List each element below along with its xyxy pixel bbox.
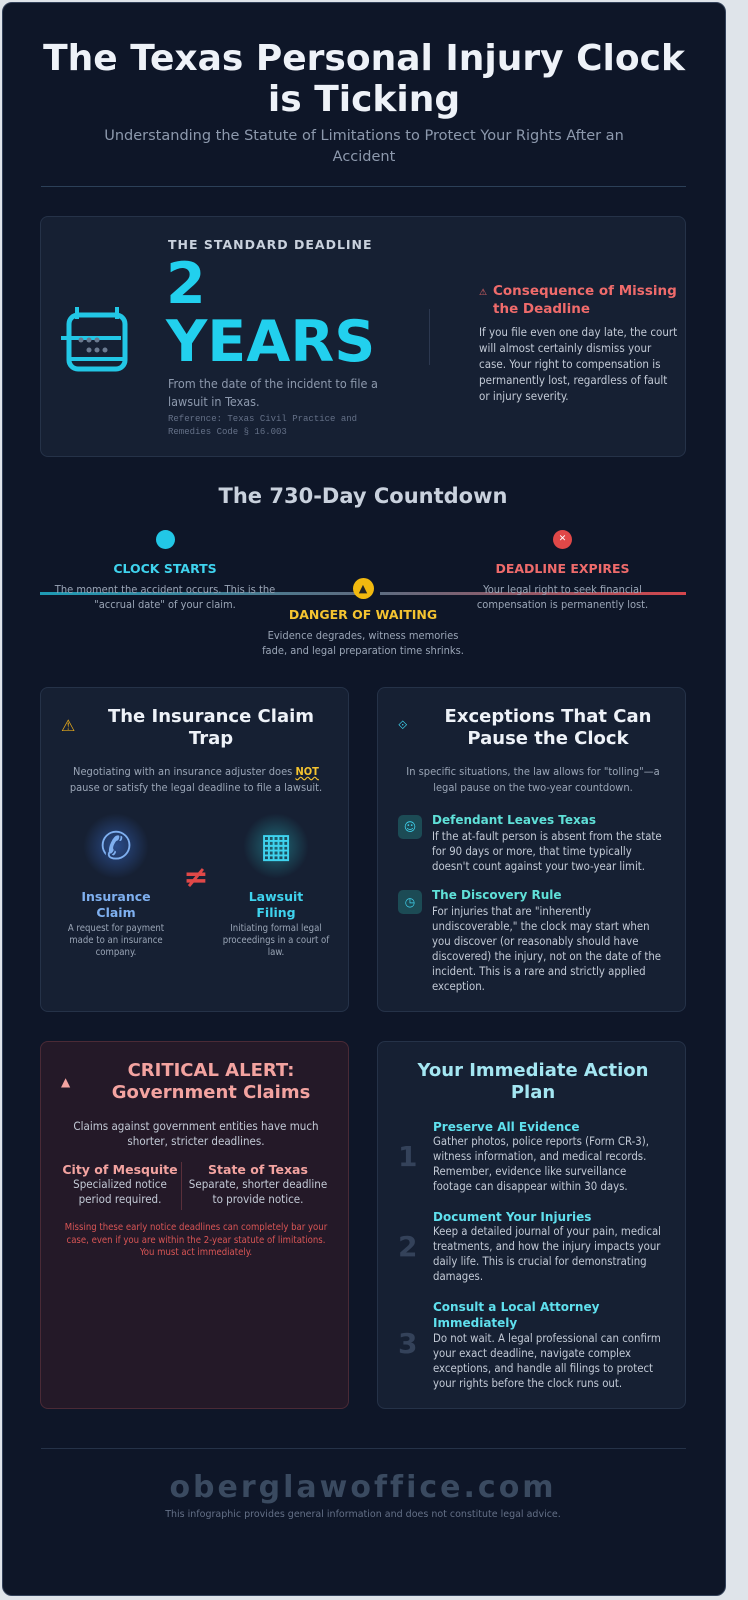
consequence: ⚠ <box>479 288 487 298</box>
step 3: Consult a Local Attorney Immediately <box>433 1300 599 1330</box>
step 2: Document Your Injuries <box>433 1210 591 1224</box>
exception 1 <box>398 813 662 873</box>
icon: calendar <box>61 307 128 372</box>
warning text: Missing these early notice deadlines can completely bar your case, even if you are within the 2-year statute of limitations. You must act immediately. <box>65 1222 327 1258</box>
item: lawsuit filing: ▦ <box>260 826 292 866</box>
footer: domain: oberglawoffice.com <box>169 1470 557 1505</box>
panel: critical alert <box>40 1041 349 1409</box>
milestone: deadline expires: ✕ <box>559 534 566 544</box>
big number: 2 years: YEARS <box>166 309 375 375</box>
item: state <box>189 1162 327 1206</box>
step 3: 3 <box>398 1327 417 1360</box>
heading: CRITICAL ALERT: Government Claims <box>112 1060 310 1103</box>
heading: standard deadline: THE STANDARD DEADLINE <box>168 237 373 252</box>
subtitle: Understanding the Statute of Limitations to Protect Your Rights After an Accident <box>104 128 624 165</box>
icon: warning: ⚠ <box>61 716 75 735</box>
icon: ▲ <box>61 1075 70 1089</box>
milestone: clock starts <box>54 530 275 611</box>
item: insurance claim: ✆ <box>100 824 132 868</box>
exception 2: The Discovery Rule <box>432 888 562 902</box>
step 1: Gather photos, police reports (Form CR-3), witness information, and medical records. Remember, evidence like surveillance footage can disappear within 30 days. <box>433 1135 649 1193</box>
item: insurance claim: A request for payment made to an insurance company. <box>68 923 164 958</box>
panel: action plan <box>377 1041 686 1409</box>
exception 1: If the at-fault person is absent from the state for 90 days or more, that time typically doesn't count against your two-year limit. <box>432 830 662 873</box>
timeline <box>40 530 686 657</box>
item: city: Specialized notice period required. <box>73 1177 167 1206</box>
item: state: State of Texas <box>208 1162 308 1177</box>
item: state: Separate, shorter deadline to provide notice. <box>189 1177 327 1206</box>
icon: ⟐ <box>398 718 407 732</box>
consequence <box>479 283 677 403</box>
item: lawsuit filing <box>223 817 330 958</box>
item: lawsuit filing: Lawsuit <box>249 889 303 904</box>
exception 1: ☺ <box>404 820 416 834</box>
consequence: Consequence of Missing the Deadline <box>493 283 677 317</box>
milestone: danger: ▲ <box>359 582 367 595</box>
heading: Your Immediate Action Plan <box>418 1060 648 1103</box>
step 2: Keep a detailed journal of your pain, medical treatments, and how the injury impacts your daily life. This is crucial for demonstrating damages. <box>433 1225 661 1283</box>
milestone: clock starts: The moment the accident occurs. This is the "accrual date" of your claim. <box>55 583 275 611</box>
icon: not equal: ≠ <box>183 860 209 895</box>
heading: countdown: The 730-Day Countdown <box>219 484 507 508</box>
heading: The Insurance Claim Trap <box>108 706 314 749</box>
step 1: 1 <box>398 1140 417 1173</box>
heading: Exceptions That Can Pause the Clock <box>445 706 651 749</box>
milestone: clock starts: CLOCK STARTS <box>113 561 217 576</box>
milestone: danger <box>262 578 464 657</box>
text: Claims against government entities have much shorter, stricter deadlines. <box>73 1119 319 1148</box>
exception 2: ◷ <box>405 895 415 909</box>
item: city <box>62 1162 178 1206</box>
big number: 2 years <box>166 251 375 375</box>
text: Negotiating with an insurance adjuster does NOT pause or satisfy the legal deadline to file a lawsuit. <box>70 765 322 794</box>
step 2: 2 <box>398 1230 417 1263</box>
footer: disclaimer: This infographic provides general information and does not constitute legal advice. <box>165 1509 561 1520</box>
milestone: deadline expires: DEADLINE EXPIRES <box>495 561 630 576</box>
title: The Texas Personal Injury Clock is Ticking <box>43 38 685 120</box>
panel: exceptions <box>377 687 686 1012</box>
intro: In specific situations, the law allows for "tolling"—a legal pause on the two-year countdown. <box>406 765 660 794</box>
exception 1: Defendant Leaves Texas <box>432 813 596 827</box>
milestone: deadline expires <box>477 530 648 611</box>
milestone: danger: DANGER OF WAITING <box>289 607 437 622</box>
milestone: danger: Evidence degrades, witness memories fade, and legal preparation time shrinks. <box>262 629 464 657</box>
item: city: City of Mesquite <box>62 1162 178 1177</box>
step 1: Preserve All Evidence <box>433 1120 580 1134</box>
consequence: If you file even one day late, the court will almost certainly dismiss your case. Your right to compensation is permanently lost, regardless of fault or injury severity. <box>479 325 677 403</box>
reference: Reference: Texas Civil Practice and Remedies Code § 16.003 <box>168 414 357 437</box>
item: lawsuit filing: Filing <box>256 905 296 920</box>
panel: insurance trap <box>40 687 349 1012</box>
item: insurance claim: Insurance Claim <box>81 889 151 920</box>
step 3 <box>398 1300 661 1390</box>
big number: 2 years: 2 <box>166 251 206 317</box>
milestone: deadline expires: Your legal right to seek financial compensation is permanently lost. <box>477 583 648 611</box>
panel: standard deadline <box>40 216 686 457</box>
item: insurance claim <box>68 816 164 958</box>
exception 2: For injuries that are "inherently undiscoverable," the clock may start when you discover (or reasonably should have discovered) the injury, not on the date of the incident. This is a rare and strictly applied exception. <box>432 905 661 993</box>
text: from date: From the date of the incident to file a lawsuit in Texas. <box>168 376 378 409</box>
item: lawsuit filing: Initiating formal legal proceedings in a court of law. <box>223 923 329 958</box>
step 1 <box>398 1120 649 1193</box>
step 2 <box>398 1210 661 1283</box>
step 3: Do not wait. A legal professional can confirm your exact deadline, navigate complex exceptions, and handle all filings to protect your rights before the clock runs out. <box>433 1332 661 1390</box>
